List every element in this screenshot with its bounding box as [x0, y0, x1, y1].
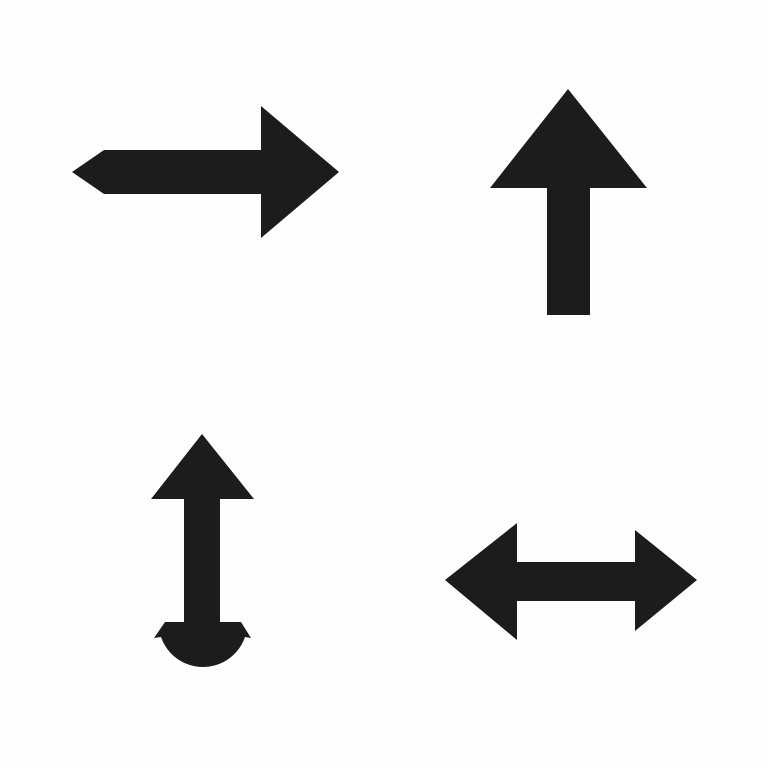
icon: up arrow — [490, 89, 647, 315]
icon: double-headed horizontal arrow — [445, 523, 697, 640]
icon: right arrow with pointed tail — [72, 106, 339, 238]
icon: up arrow with semicircular base — [151, 434, 254, 667]
